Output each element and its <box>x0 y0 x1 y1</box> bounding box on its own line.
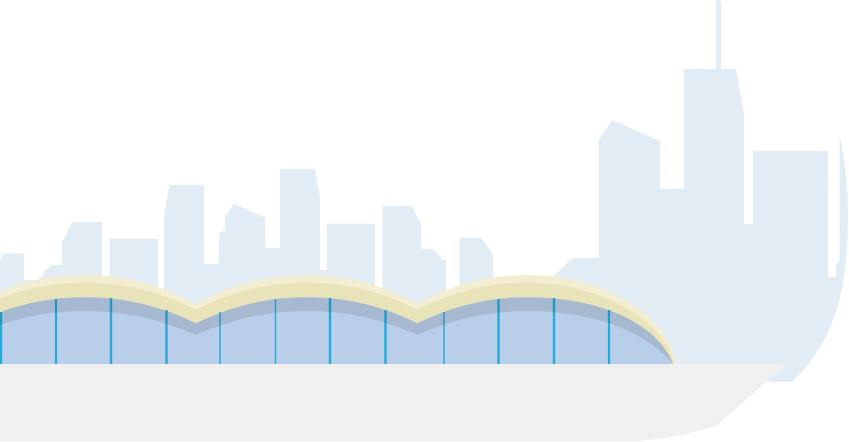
glass facade <box>0 297 673 364</box>
roof: darker inner band <box>0 283 674 364</box>
roof shadow band <box>0 297 673 364</box>
facade mullions <box>1 298 609 364</box>
roof: outer light band <box>0 275 675 364</box>
ground platform <box>0 364 787 441</box>
